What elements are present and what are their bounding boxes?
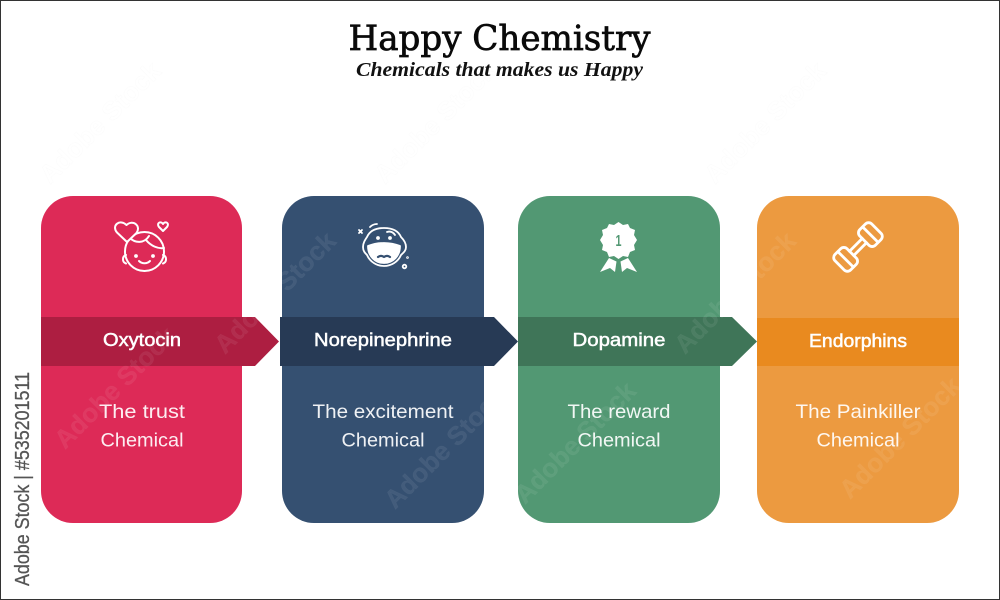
watermark: diagonal Adobe Stock repeats on cards xyxy=(48,225,967,514)
description: endorphins: Chemical xyxy=(816,430,900,452)
panel: oxytocin xyxy=(41,196,279,523)
description: norepinephrine: Chemical xyxy=(342,430,424,452)
icon: smiling face with hearts xyxy=(115,222,168,271)
title: Happy Chemistry xyxy=(348,19,651,59)
panel: dopamine xyxy=(518,196,757,523)
watermark: diagonal Adobe Stock repeats on cards: Adobe Stock xyxy=(668,225,802,359)
icon: award ribbon number one: 1 xyxy=(616,233,622,250)
band: endorphins xyxy=(757,318,959,366)
watermark: diagonal Adobe Stock repeats xyxy=(33,55,832,189)
label: endorphins: Endorphins xyxy=(809,330,907,351)
icon: award ribbon number one xyxy=(600,222,637,272)
description: endorphins: The Painkiller xyxy=(796,401,921,423)
watermark: diagonal Adobe Stock repeats: Adobe Stock xyxy=(33,55,167,189)
watermark: stock id: Adobe Stock | #535201511 xyxy=(12,372,34,586)
watermark: diagonal Adobe Stock repeats on cards: Adobe Stock xyxy=(378,380,512,514)
label: norepinephrine: Norepinephrine xyxy=(314,329,452,350)
label: dopamine: Dopamine xyxy=(572,329,666,350)
description: oxytocin: Chemical xyxy=(100,430,184,452)
description: dopamine: Chemical xyxy=(578,430,660,452)
arrow band: dopamine xyxy=(518,317,757,366)
watermark: diagonal Adobe Stock repeats on cards: Adobe Stock xyxy=(508,375,642,509)
description: dopamine: The reward xyxy=(568,401,670,423)
card background: endorphins xyxy=(757,196,959,523)
icon: laughing face xyxy=(359,224,408,268)
card background: norepinephrine xyxy=(282,196,484,523)
card background: dopamine xyxy=(518,196,720,523)
label: oxytocin: Oxytocin xyxy=(103,329,181,350)
watermark: diagonal Adobe Stock repeats: Adobe Stock xyxy=(698,55,832,189)
panel: endorphins xyxy=(757,196,959,523)
icon: dumbbell xyxy=(832,221,884,273)
subtitle: Chemicals that makes us Happy xyxy=(356,59,643,81)
arrow band: oxytocin xyxy=(41,317,279,366)
watermark: diagonal Adobe Stock repeats: Adobe Stock xyxy=(368,55,502,189)
watermark: diagonal Adobe Stock repeats on cards: Adobe Stock xyxy=(208,225,342,359)
watermark: diagonal Adobe Stock repeats on cards: Adobe Stock xyxy=(833,370,967,504)
card background: oxytocin xyxy=(41,196,242,523)
description: oxytocin: The trust xyxy=(99,401,186,423)
panel: norepinephrine xyxy=(280,196,518,523)
watermark: diagonal Adobe Stock repeats on cards: Adobe Stock xyxy=(48,320,182,454)
arrow band: norepinephrine xyxy=(280,317,518,366)
description: norepinephrine: The excitement xyxy=(312,401,454,423)
